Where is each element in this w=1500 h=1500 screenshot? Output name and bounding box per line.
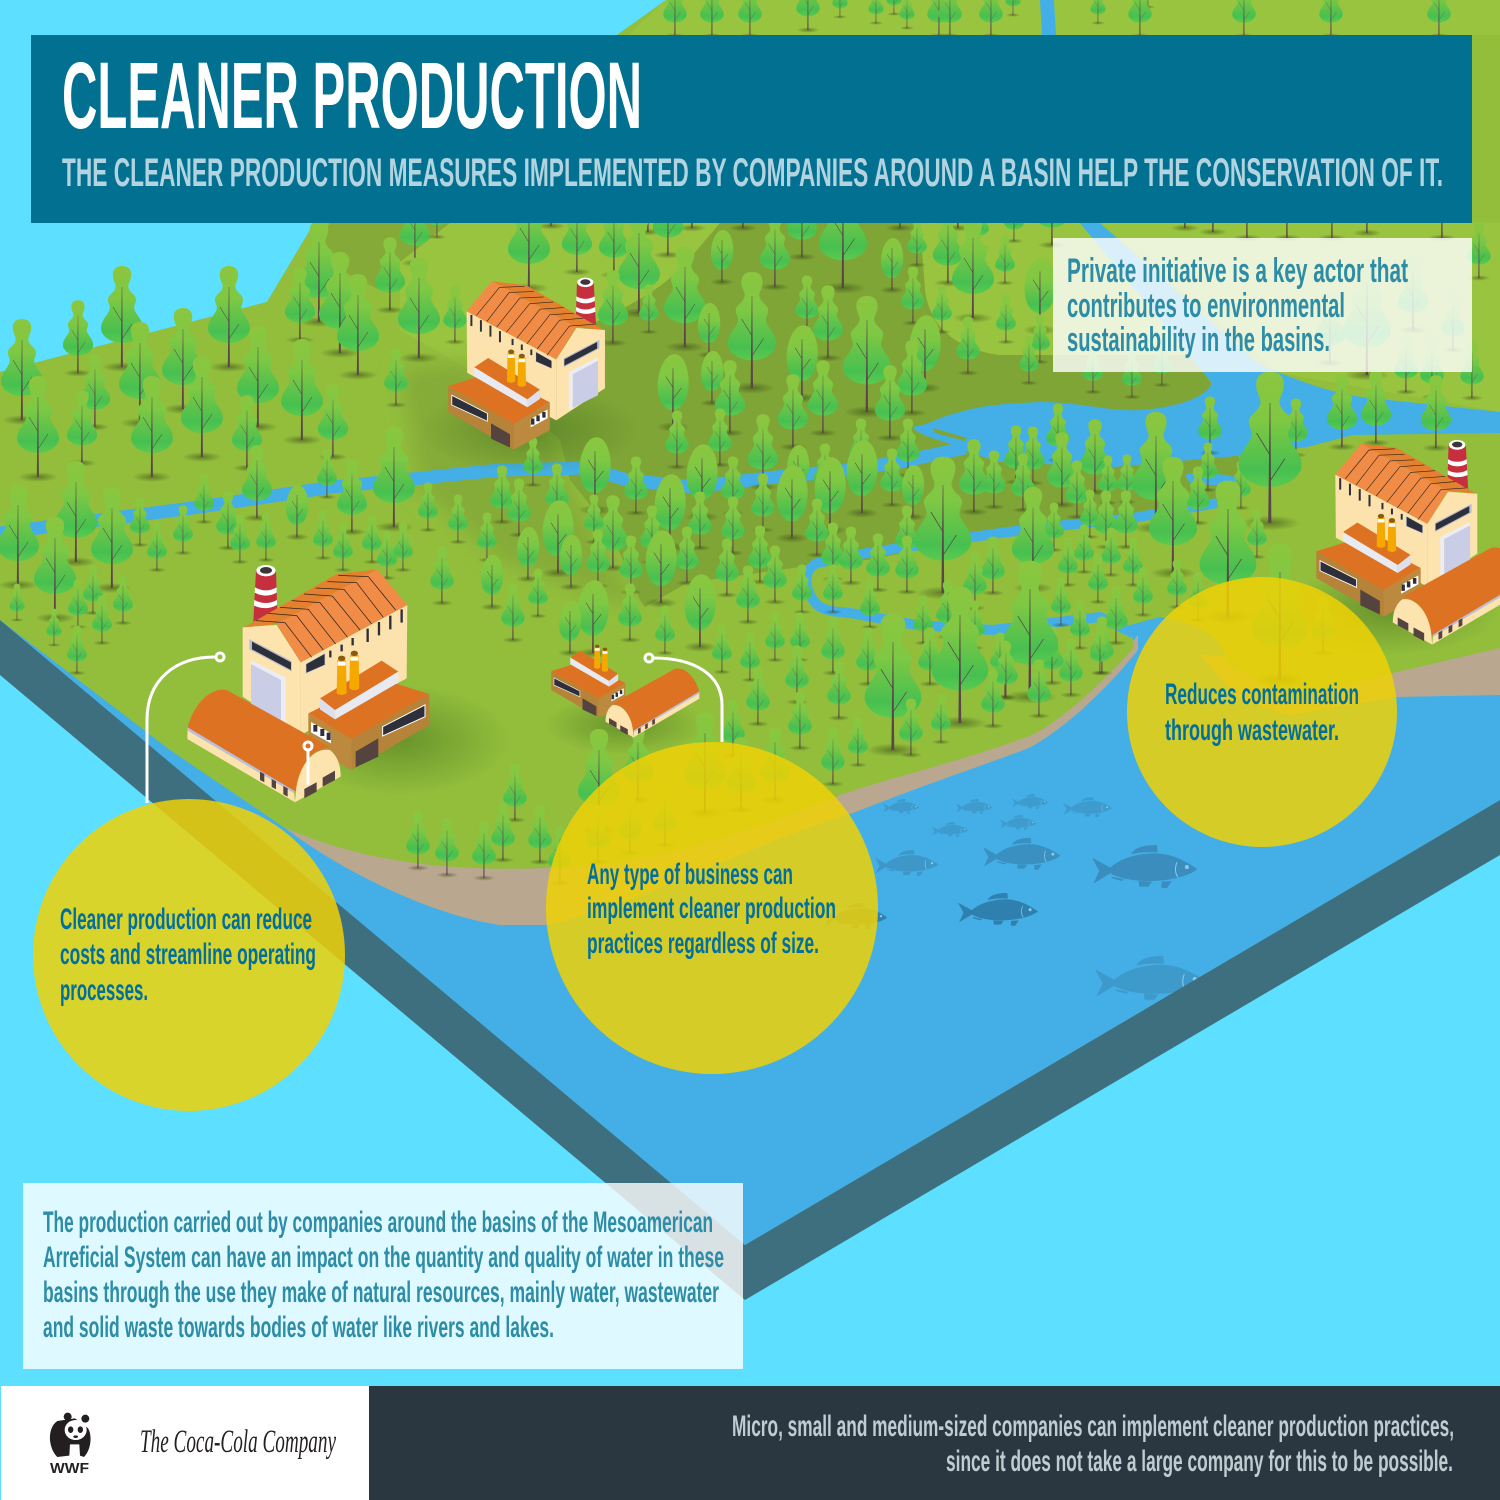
mid tone transition — [400, 362, 640, 610]
fish school — [824, 794, 1206, 1002]
light forest zone — [400, 0, 1500, 412]
panel: private initiative — [1053, 238, 1472, 372]
factory: left — [187, 565, 429, 802]
side pool — [1185, 473, 1247, 488]
panel text: basins through the use they make of natural resources, mainly water, wastewater — [43, 1276, 719, 1309]
panel text: Arreficial System can have an impact on the quantity and quality of water in these — [43, 1241, 724, 1274]
circle callout: any size — [546, 742, 878, 1074]
main river — [0, 448, 965, 533]
circle callout: wastewater — [1127, 577, 1397, 847]
callout text: Reduces contamination — [1165, 678, 1359, 711]
top river — [1040, 0, 1056, 35]
title: CLEANER PRODUCTION — [62, 43, 642, 149]
callout text: practices regardless of size. — [587, 927, 819, 960]
factory: small — [551, 645, 699, 737]
factory: top — [448, 278, 605, 450]
panel text: sustainability in the basins. — [1067, 321, 1330, 359]
rivers — [0, 0, 1500, 633]
lake and upper river — [912, 223, 1500, 467]
callout text: implement cleaner production — [587, 892, 836, 925]
title banner — [31, 35, 1472, 223]
factory: right — [1316, 440, 1500, 645]
panel text: and solid waste towards bodies of water like rivers and lakes. — [43, 1311, 554, 1344]
Coca-Cola wordmark: The Coca-Cola Company — [140, 1424, 336, 1460]
icon: WWF panda — [50, 1413, 91, 1457]
panel text: The production carried out by companies around the basins of the Mesoamerican — [43, 1206, 713, 1239]
WWF wordmark: WWF — [50, 1460, 89, 1477]
connector: left factory — [147, 653, 312, 803]
callout text: Cleaner production can reduce — [60, 903, 312, 936]
land — [0, 0, 1500, 869]
footer: logos — [1, 1386, 369, 1500]
footer: message — [369, 1386, 1500, 1500]
callout text: processes. — [60, 974, 148, 1007]
forest — [0, 0, 1491, 886]
factory ground shadows — [290, 385, 1500, 795]
panel: basin production — [23, 1183, 743, 1369]
connector: small factory — [645, 654, 722, 742]
plate edge — [0, 620, 1500, 1300]
dark forest zone — [480, 223, 1240, 607]
circle callout: costs — [33, 799, 345, 1111]
sandbar — [933, 428, 967, 441]
dark patch upper left — [310, 223, 450, 290]
callout text: Any type of business can — [587, 858, 793, 891]
callout text: through wastewater. — [1165, 714, 1339, 747]
beach — [285, 635, 1500, 925]
notch of sky at top right — [1385, 0, 1403, 12]
callout text: costs and streamline operating — [60, 938, 316, 971]
lower river — [806, 503, 1217, 633]
